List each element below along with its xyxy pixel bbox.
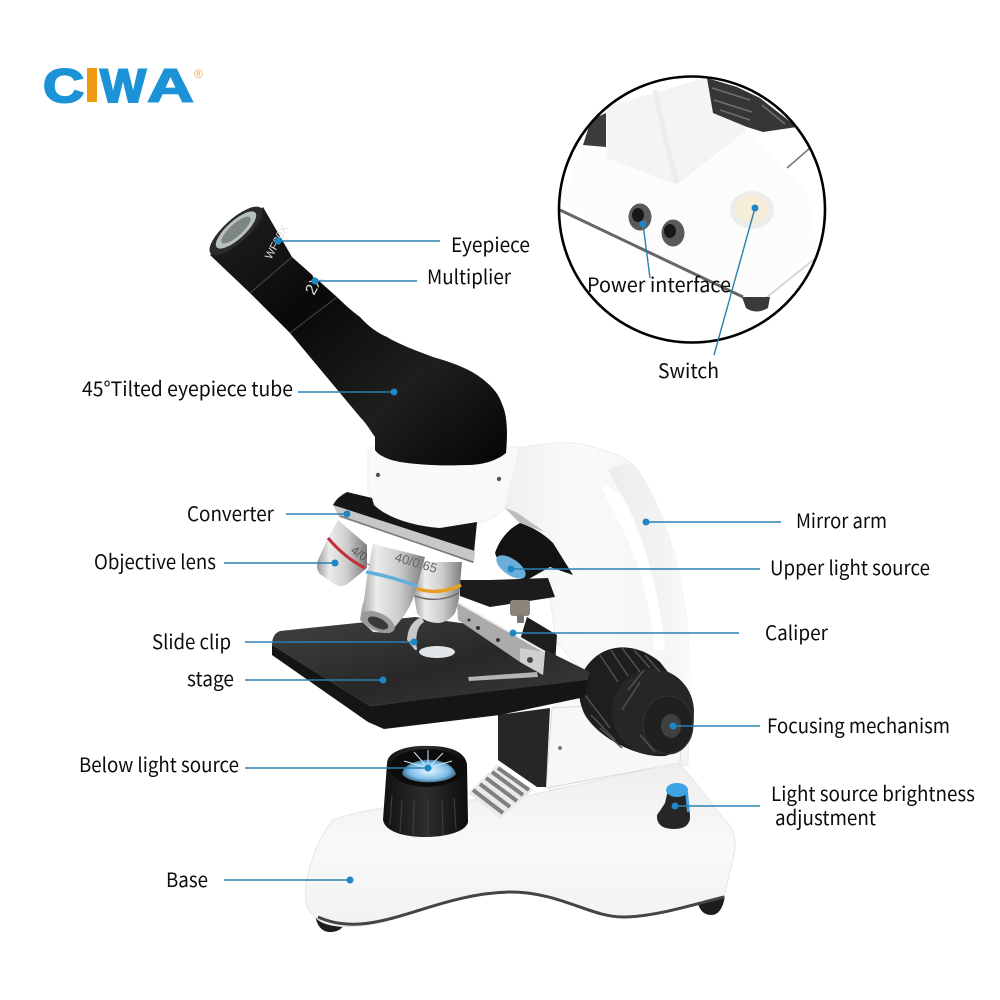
objective lens: right: [413, 562, 462, 623]
callout: stage: stage: [187, 663, 234, 692]
inset focus knob: [707, 78, 797, 132]
inset jack 1: [628, 204, 652, 230]
callout: Focusing mechanism: [670, 710, 950, 739]
inset base shell: [562, 130, 817, 298]
callout: Below light source: [79, 749, 432, 778]
below light source: [383, 746, 468, 837]
upper light source: [492, 523, 573, 583]
objective lens: middle: 40/0.65: [393, 549, 439, 576]
mechanical stage caliper: [457, 600, 545, 675]
eyepiece tube: WF20X: [263, 223, 291, 261]
callout: Caliper: Caliper: [765, 617, 828, 646]
stage: [272, 617, 590, 729]
objective lens: middle: [358, 544, 439, 638]
callout: Switch: [658, 204, 758, 384]
callout: Converter: Converter: [187, 498, 274, 527]
arch flange: [505, 508, 545, 532]
callout: Upper light source: [508, 552, 930, 581]
eyepiece tube: [203, 199, 507, 465]
callout: Eyepiece: [274, 229, 530, 258]
caliper back block: [460, 578, 557, 665]
focus rack: [498, 708, 550, 787]
vent grille: [468, 765, 533, 818]
inset post: [583, 113, 606, 147]
arm opening: [602, 485, 665, 650]
base: [305, 763, 735, 932]
callout: Base: Base: [166, 864, 208, 893]
callout: Converter: [187, 498, 350, 527]
logo: CIWA: W: [100, 59, 147, 112]
logo: CIWA: ®: [194, 67, 203, 81]
callout: Multiplier: [312, 261, 511, 290]
focus knob: [579, 647, 694, 756]
callout: Eyepiece: Eyepiece: [451, 229, 530, 258]
foot right: [697, 896, 725, 915]
callout: Caliper: [510, 617, 828, 646]
inset base edge: [560, 210, 743, 297]
callout: Objective lens: [94, 546, 338, 575]
callout: Slide clip: Slide clip: [152, 626, 231, 655]
objective lens: left: [317, 520, 378, 586]
inset jack 2: [662, 220, 684, 246]
logo: CIWA: [43, 59, 203, 112]
callout: stage: [187, 663, 386, 692]
callout: Objective lens: Objective lens: [94, 546, 216, 575]
microscope body: arm and column: [505, 443, 690, 790]
inset switch: [730, 191, 774, 229]
collar: [368, 447, 520, 528]
converter: [333, 492, 477, 563]
callout: 45° tilted eyepiece tube: 45°Tilted eyepiece tube: [82, 373, 293, 402]
callout: Light source brightness adjustment: adjustment: [775, 802, 876, 831]
callout: Power interface: Power interface: [587, 269, 731, 298]
callout: Light source brightness adjustment: Light source brightness: [771, 778, 975, 807]
callout: Light source brightness adjustment: [672, 778, 975, 831]
inset column: [607, 77, 747, 185]
callout: Focusing mechanism: Focusing mechanism: [767, 710, 950, 739]
eyepiece tube: 2X: [303, 272, 327, 298]
inset: rear view circle: [558, 76, 826, 344]
foot left: [315, 915, 345, 932]
callout: Mirror arm: [642, 505, 887, 534]
callout: Switch: Switch: [658, 355, 719, 384]
callout: Slide clip: [152, 626, 418, 655]
objective lens: left: 4/0.1: [348, 543, 378, 570]
callout: Base: [166, 864, 354, 893]
callout: Power interface: [587, 220, 731, 298]
callout: Below light source: Below light source: [79, 749, 239, 778]
callout: Multiplier: Multiplier: [427, 261, 511, 290]
logo: CIWA: A: [147, 59, 194, 112]
arm outer strip: [608, 464, 690, 690]
base shell: [305, 763, 735, 927]
callout: 45° tilted eyepiece tube: [82, 373, 398, 402]
callout: Upper light source: Upper light source: [770, 552, 930, 581]
logo: CIWA: C: [43, 59, 84, 112]
brightness knob: [657, 783, 690, 829]
callout: Mirror arm: Mirror arm: [796, 505, 887, 534]
inset foot: [742, 297, 770, 312]
